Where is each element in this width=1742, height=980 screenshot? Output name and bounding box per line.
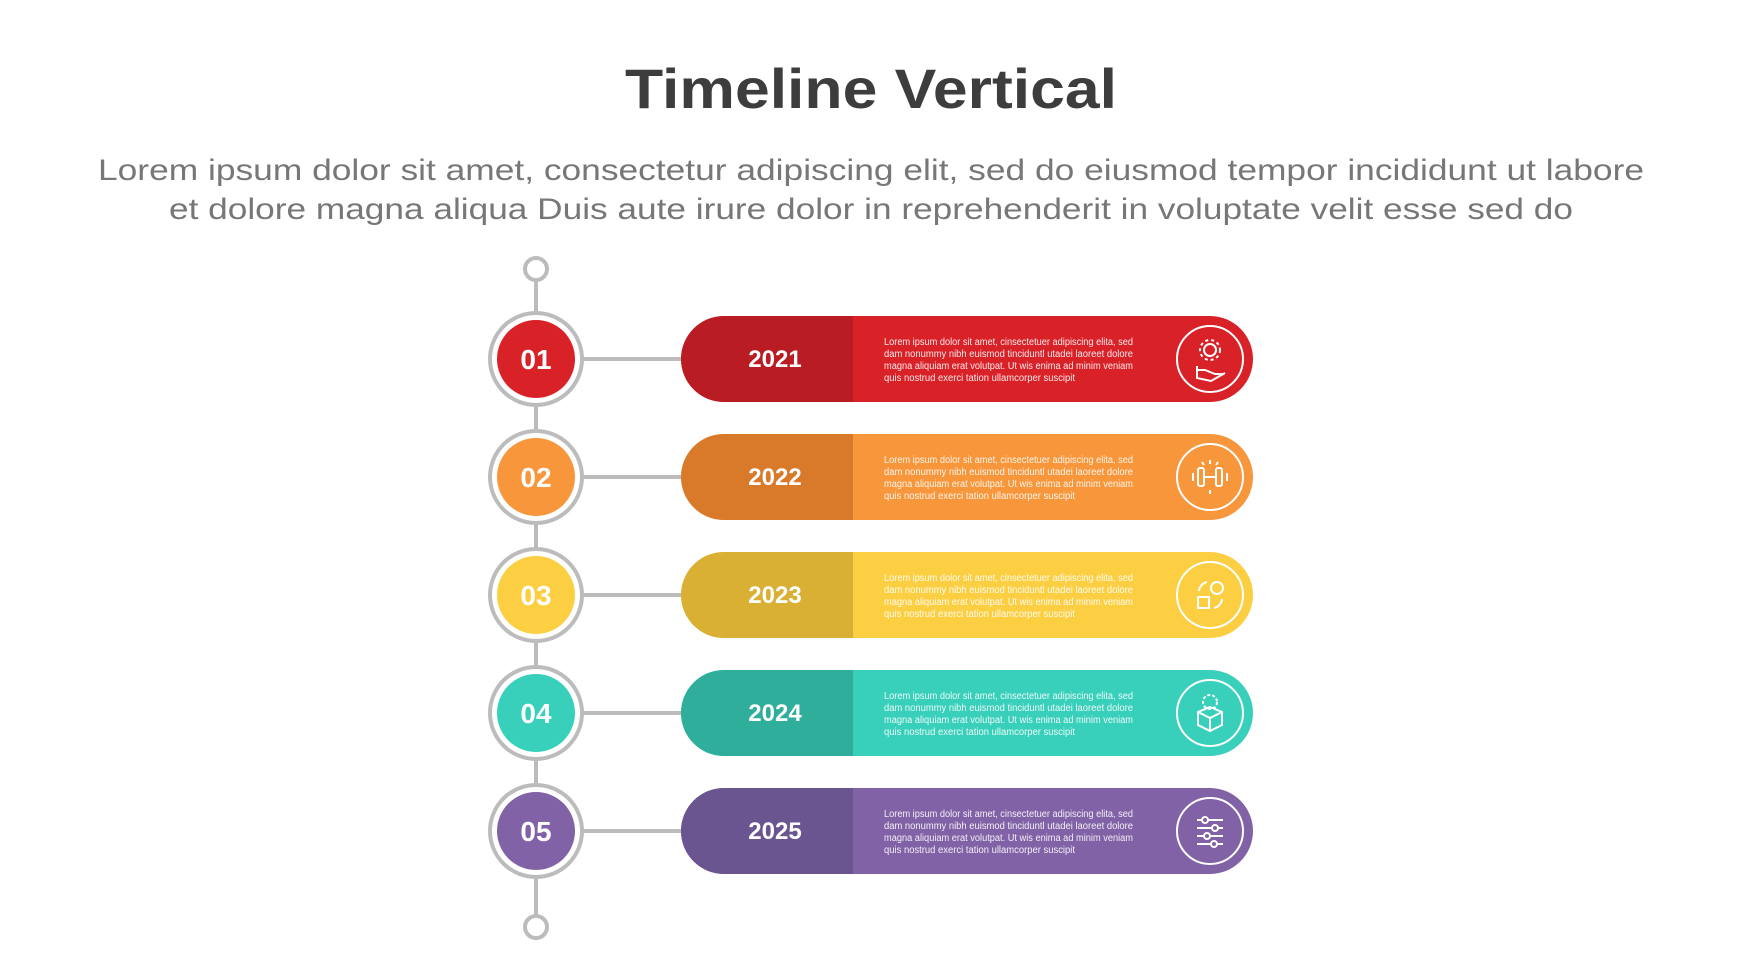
row 2: magna aliquiam erat volutpat. Ut wis enima ad minim veniam [884,479,1133,490]
row 4: quis nostrud exerci tation ullamcorper suscipit [884,727,1075,738]
row 3: dam nonummy nibh euismod tinciduntl utadei laoreet dolore [884,585,1133,596]
row 2: 02 [520,462,552,493]
row 5: magna aliquiam erat volutpat. Ut wis enima ad minim veniam [884,833,1133,844]
row 1: dam nonummy nibh euismod tinciduntl utadei laoreet dolore [884,349,1133,360]
row 4: 04 [520,698,552,729]
row 4: Lorem ipsum dolor sit amet, cinsectetuer adipiscing elita, sed [884,691,1133,702]
row 2: 2022 [748,464,802,491]
row 5: dam nonummy nibh euismod tinciduntl utadei laoreet dolore [884,821,1133,832]
row 4 [490,667,1253,759]
timeline spine [525,258,547,938]
icon: shapes cycle [1177,562,1243,628]
row 4: magna aliquiam erat volutpat. Ut wis enima ad minim veniam [884,715,1133,726]
subtitle: Lorem ipsum dolor sit amet, consectetur adipiscing elit, sed do eiusmod tempor incididunt ut labore [98,154,1644,187]
row 2: Lorem ipsum dolor sit amet, cinsectetuer adipiscing elita, sed [884,455,1133,466]
row 5: Lorem ipsum dolor sit amet, cinsectetuer adipiscing elita, sed [884,809,1133,820]
row 1: magna aliquiam erat volutpat. Ut wis enima ad minim veniam [884,361,1133,372]
subtitle: et dolore magna aliqua Duis aute irure dolor in reprehenderit in voluptate velit esse sed do [169,193,1573,226]
row 4: dam nonummy nibh euismod tinciduntl utadei laoreet dolore [884,703,1133,714]
row 1 [490,313,1253,405]
icon: gear hand [1177,326,1243,392]
title: Timeline Vertical [625,57,1117,120]
icon: sliders [1177,798,1243,864]
icon: dumbbell [1177,444,1243,510]
row 1: 2021 [748,346,802,373]
row 2: dam nonummy nibh euismod tinciduntl utadei laoreet dolore [884,467,1133,478]
row 3: 03 [520,580,552,611]
row 3: 2023 [748,582,802,609]
row 4: 2024 [748,700,802,727]
icon: box gear [1177,680,1243,746]
row 5: quis nostrud exerci tation ullamcorper suscipit [884,845,1075,856]
row 5: 2025 [748,818,802,845]
row 3 [490,549,1253,641]
row 2: quis nostrud exerci tation ullamcorper suscipit [884,491,1075,502]
row 3: Lorem ipsum dolor sit amet, cinsectetuer adipiscing elita, sed [884,573,1133,584]
row 1: quis nostrud exerci tation ullamcorper suscipit [884,373,1075,384]
subtitle [98,154,1644,226]
row 5: 05 [520,816,552,847]
row 5 [490,785,1253,877]
row 2 [490,431,1253,523]
row 3: quis nostrud exerci tation ullamcorper suscipit [884,609,1075,620]
row 3: magna aliquiam erat volutpat. Ut wis enima ad minim veniam [884,597,1133,608]
row 1: Lorem ipsum dolor sit amet, cinsectetuer adipiscing elita, sed [884,337,1133,348]
row 1: 01 [520,344,552,375]
